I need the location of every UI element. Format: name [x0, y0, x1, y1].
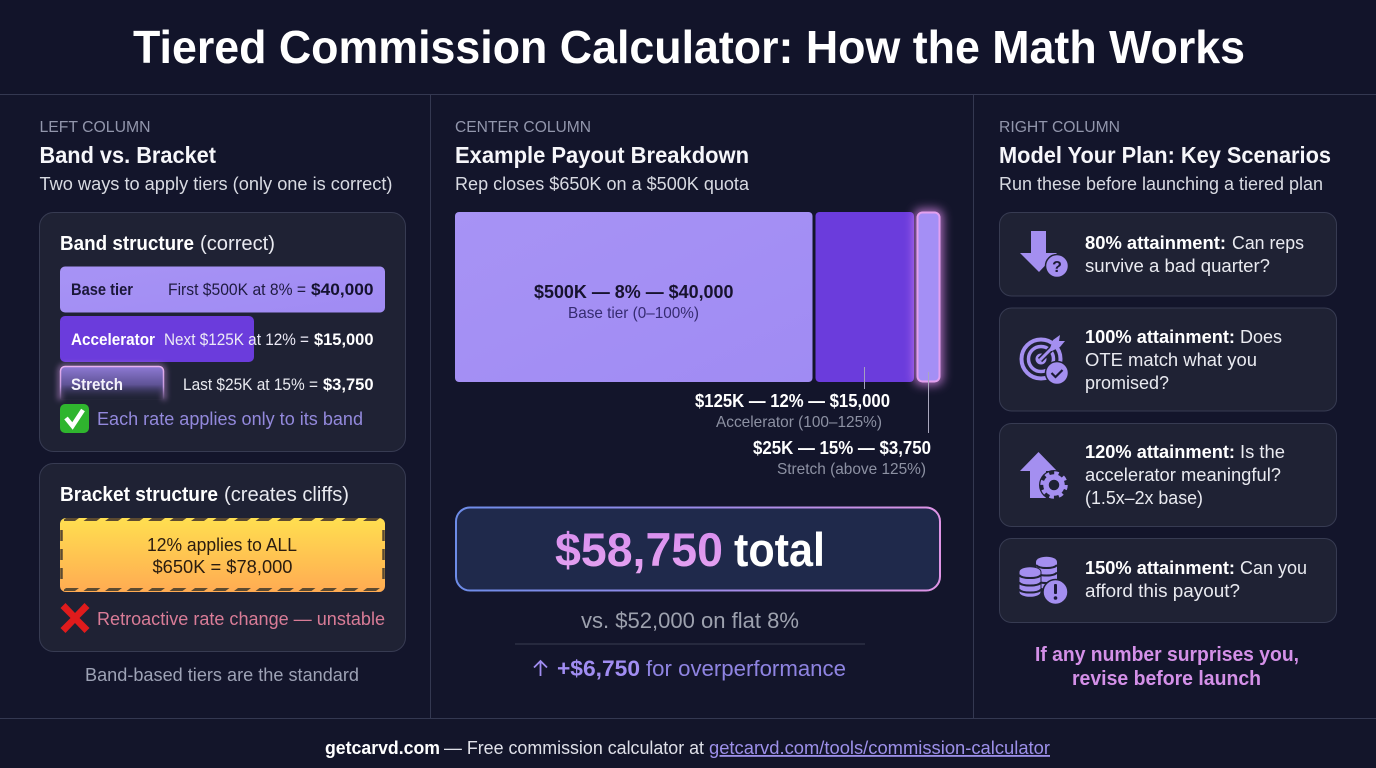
- scenario card: 80%: Can reps: [1232, 233, 1304, 253]
- panel: right column: [999, 119, 1336, 690]
- scenario card: 80%: [1000, 212, 1336, 296]
- scenario card: 150%: afford this payout?: [1085, 581, 1240, 601]
- closing callout: [1035, 644, 1299, 690]
- base tier segment: Base tier (0–100%): [568, 305, 699, 322]
- scenario card: 100%: [1000, 308, 1336, 411]
- icon: down arrow with question mark: ?: [1052, 259, 1062, 276]
- title: Tiered Commission Calculator: How the Math Works: [133, 21, 1245, 73]
- overperformance gain: [534, 656, 846, 681]
- center column heading: CENTER COLUMN: [455, 119, 591, 136]
- closing callout: If any number surprises you,: [1035, 644, 1299, 666]
- stretch bar: $3,750: [323, 376, 374, 394]
- scenario card: 120%: Is the: [1240, 442, 1285, 462]
- center column heading: [455, 119, 750, 194]
- bracket structure heading: [60, 484, 349, 506]
- accelerator segment: [816, 212, 914, 382]
- scenario card: 80%: survive a bad quarter?: [1085, 256, 1270, 276]
- icon: up arrow: [534, 661, 547, 676]
- stretch segment: [914, 209, 943, 385]
- scenario card: 120%: [1000, 424, 1336, 526]
- total callout: total: [734, 523, 825, 576]
- scenario card: 80%: 80% attainment:: [1085, 233, 1226, 253]
- band structure heading: Band structure: [60, 233, 194, 255]
- base tier segment: [455, 212, 812, 382]
- base tier bar: [60, 266, 385, 312]
- base tier segment: $500K — 8% — $40,000: [534, 282, 734, 302]
- base tier bar: $40,000: [311, 281, 374, 299]
- accelerator bar: Next $125K at 12% =: [164, 331, 309, 349]
- left column heading: LEFT COLUMN: [40, 119, 150, 136]
- right column heading: Run these before launching a tiered plan: [999, 174, 1323, 194]
- overperformance gain: for overperformance: [646, 656, 846, 681]
- scenario card: 100%: Does: [1240, 327, 1282, 347]
- stretch bar: [60, 366, 374, 400]
- right column heading: RIGHT COLUMN: [999, 119, 1120, 136]
- left column heading: Two ways to apply tiers (only one is correct): [40, 174, 392, 194]
- scenario card: 100%: 100% attainment:: [1085, 327, 1235, 347]
- band structure heading: (correct): [200, 233, 275, 255]
- left column heading: [40, 119, 392, 194]
- scenario card: 150%: Can you: [1240, 558, 1307, 578]
- base tier bar: First $500K at 8% =: [168, 281, 306, 299]
- scenario card: 120%: (1.5x–2x base): [1085, 488, 1203, 508]
- payout bar chart: [455, 209, 943, 478]
- stretch bar: Stretch: [71, 376, 123, 394]
- stretch bar: Last $25K at 15% =: [183, 376, 318, 394]
- total callout: $58,750: [555, 523, 723, 576]
- overperformance gain: +$6,750: [557, 656, 640, 681]
- icon: down arrow with question mark: [1020, 231, 1068, 278]
- accelerator callout: Accelerator (100–125%): [716, 414, 882, 431]
- footer: getcarvd.com: [325, 738, 440, 758]
- band note: Each rate applies only to its band: [97, 409, 363, 429]
- left column footnote: Band-based tiers are the standard: [85, 665, 359, 685]
- scenario card: 100%: OTE match what you: [1085, 350, 1257, 370]
- center column heading: Example Payout Breakdown: [455, 142, 749, 168]
- panel: band structure: [40, 212, 406, 452]
- icon: up arrow with gear: [1020, 452, 1069, 500]
- left column heading: Band vs. Bracket: [40, 142, 216, 168]
- panel: center column: [455, 119, 943, 681]
- right column heading: Model Your Plan: Key Scenarios: [999, 142, 1331, 168]
- bracket structure heading: Bracket structure: [60, 484, 218, 506]
- panel: bracket structure: [40, 464, 406, 652]
- accelerator callout: $125K — 12% — $15,000: [695, 391, 890, 411]
- band structure heading: [60, 233, 275, 255]
- base tier bar: Base tier: [71, 281, 134, 299]
- scenario card: 100%: promised?: [1085, 373, 1169, 393]
- footer: — Free commission calculator at: [444, 738, 704, 758]
- total callout: [456, 508, 940, 590]
- right column heading: [999, 119, 1331, 194]
- stretch callout: Stretch (above 125%): [777, 461, 926, 478]
- accelerator bar: [60, 316, 374, 362]
- center column heading: Rep closes $650K on a $500K quota: [455, 174, 750, 194]
- scenario card: 150%: [1000, 538, 1336, 622]
- stretch callout: $25K — 15% — $3,750: [753, 438, 931, 458]
- accelerator callout: [695, 367, 890, 431]
- bracket warning box: 12% applies to ALL: [147, 535, 297, 555]
- scenario card: 150%: 150% attainment:: [1085, 558, 1235, 578]
- footer: [325, 738, 1050, 758]
- scenario card: 120%: accelerator meaningful?: [1085, 465, 1281, 485]
- icon: coins with alert: [1019, 557, 1068, 604]
- footer: getcarvd.com/tools/commission-calculator: [709, 738, 1050, 758]
- stretch callout: [753, 372, 931, 478]
- bracket note: Retroactive rate change — unstable: [97, 609, 385, 629]
- panel: left column: [40, 119, 406, 685]
- icon: target with check: [1022, 335, 1068, 384]
- closing callout: revise before launch: [1072, 668, 1261, 690]
- accelerator bar: Accelerator: [71, 331, 156, 349]
- accelerator bar: $15,000: [314, 331, 374, 349]
- bracket structure heading: (creates cliffs): [224, 484, 349, 506]
- flat rate comparison: vs. $52,000 on flat 8%: [581, 608, 799, 633]
- icon: red cross: [60, 603, 90, 633]
- scenario card: 120%: 120% attainment:: [1085, 442, 1235, 462]
- icon: green check: [60, 404, 89, 433]
- bracket warning box: [60, 518, 385, 592]
- bracket warning box: $650K = $78,000: [152, 557, 292, 577]
